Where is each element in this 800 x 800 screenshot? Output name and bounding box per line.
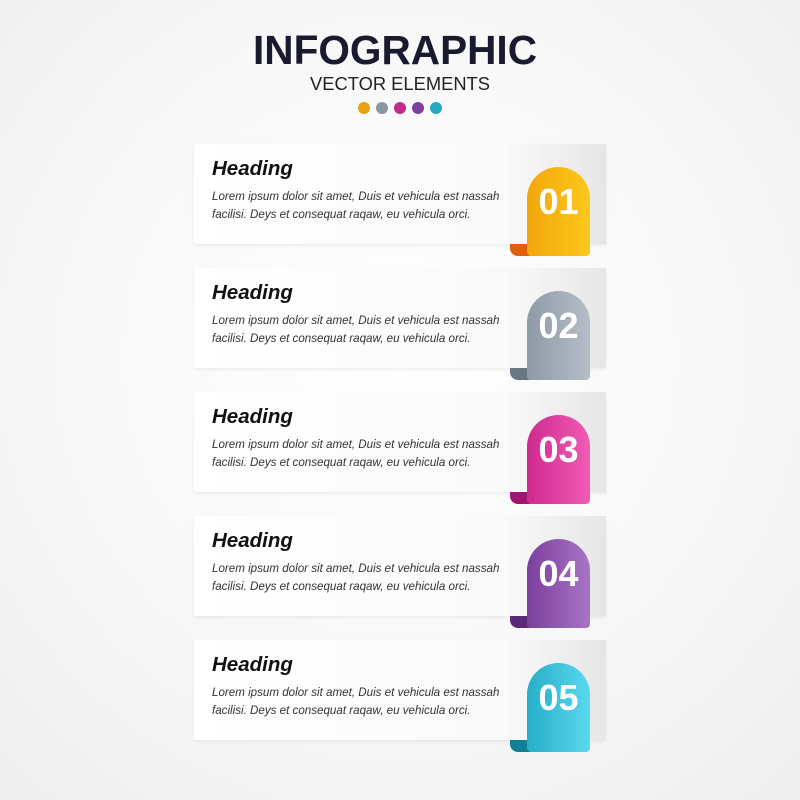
panel: step 02: 02 xyxy=(538,305,579,346)
panel: step 03 xyxy=(194,392,606,492)
panel: step 05: Lorem ipsum dolor sit amet, Duis et vehicula est nassah facilisi. Deys et consequat raqaw, eu vehicula orci. xyxy=(212,686,499,717)
panel: step 01: Lorem ipsum dolor sit amet, Duis et vehicula est nassah facilisi. Deys et consequat raqaw, eu vehicula orci. xyxy=(212,190,499,221)
panel: step 04 xyxy=(194,516,606,616)
panel: step 02: Heading xyxy=(212,281,293,304)
panel: step 04: Lorem ipsum dolor sit amet, Duis et vehicula est nassah facilisi. Deys et consequat raqaw, eu vehicula orci. xyxy=(212,562,499,593)
title: VECTOR ELEMENTS xyxy=(310,74,490,94)
panel: step 02 xyxy=(194,268,606,368)
panel: step 03: Lorem ipsum dolor sit amet, Duis et vehicula est nassah facilisi. Deys et consequat raqaw, eu vehicula orci. xyxy=(212,438,499,469)
panel: step 02: Lorem ipsum dolor sit amet, Duis et vehicula est nassah facilisi. Deys et consequat raqaw, eu vehicula orci. xyxy=(212,314,499,345)
panel: step 01: 01 xyxy=(538,181,579,222)
panel: step 01 xyxy=(194,144,606,244)
title xyxy=(253,27,537,114)
panel: step 04: Heading xyxy=(212,529,293,552)
panel: step 04: 04 xyxy=(538,553,579,594)
panel: step 05: 05 xyxy=(538,677,579,718)
panel: step 03: 03 xyxy=(538,429,579,470)
panel: step 03: Heading xyxy=(212,405,293,428)
panel: step 05 xyxy=(194,640,606,740)
panel: step 05: Heading xyxy=(212,653,293,676)
panel: step 01: Heading xyxy=(212,157,293,180)
title: INFOGRAPHIC xyxy=(253,27,537,73)
